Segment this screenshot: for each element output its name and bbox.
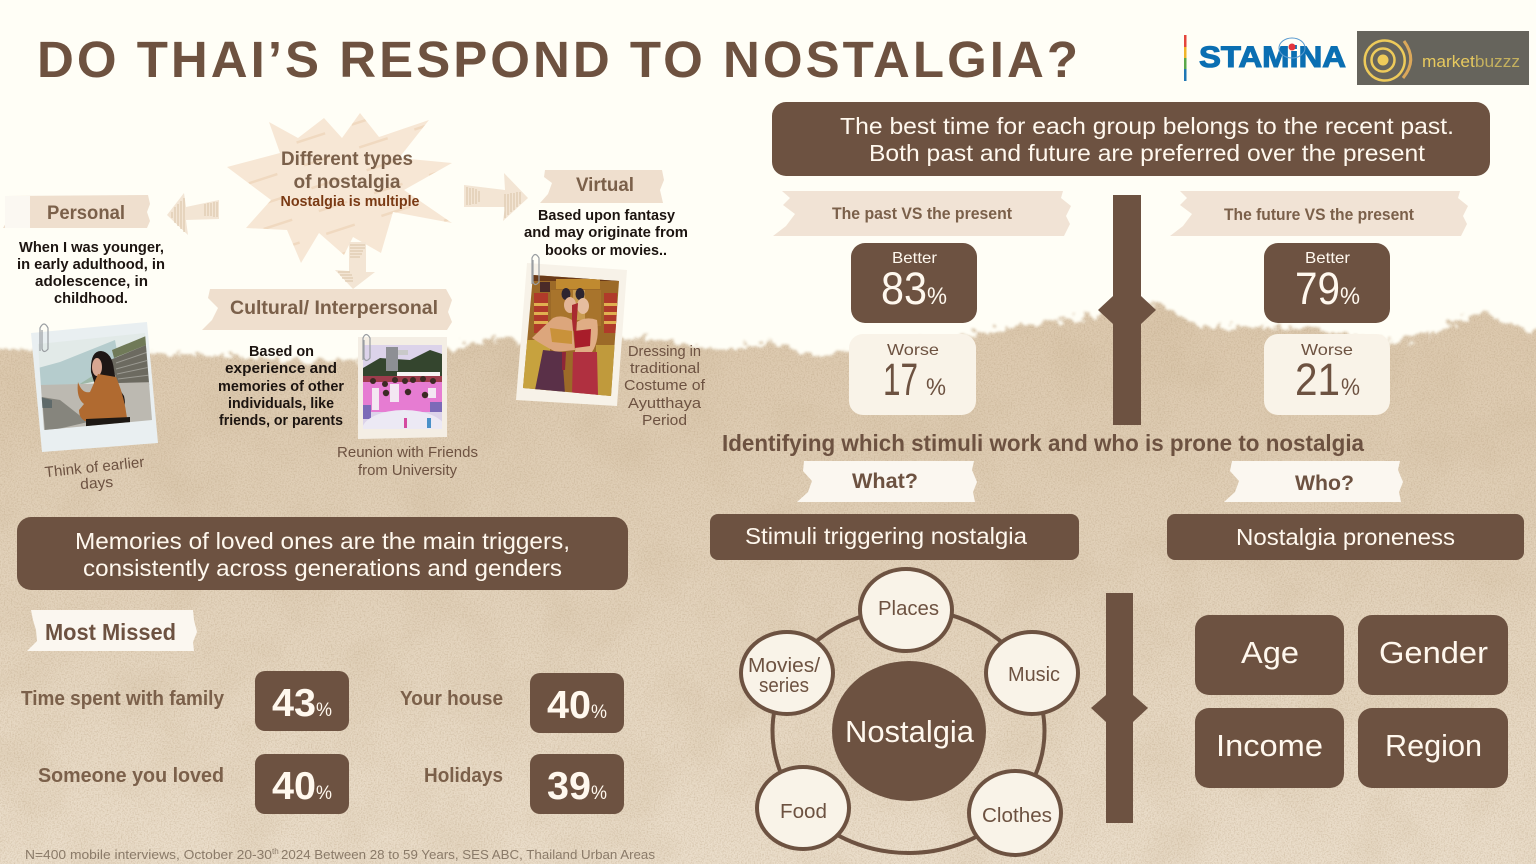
text: personal description: When I was younger, xyxy=(19,239,164,256)
text: cultural description: experience and xyxy=(225,360,337,377)
diagram: nostalgia cycle: Music xyxy=(1008,664,1060,686)
text: cultural description: Based on xyxy=(249,343,314,360)
stat: someone you loved: Someone you loved xyxy=(38,765,224,787)
diagram: nostalgia cycle: Places xyxy=(878,598,939,620)
stat: time spent with family: Time spent with family xyxy=(21,688,225,710)
text: cultural description xyxy=(218,343,344,429)
stat: holidays: Holidays xyxy=(424,765,503,787)
arrow: right to virtual xyxy=(464,173,528,221)
tape heading: most missed xyxy=(27,610,197,651)
caption: reunion with friends: Reunion with Friends xyxy=(337,444,478,461)
card: future worse 21% xyxy=(1264,334,1390,415)
panel: memories banner xyxy=(17,517,628,590)
panel: best time banner xyxy=(772,102,1490,176)
footnote: th xyxy=(272,847,279,856)
panel: starburst types of nostalgia: Different types xyxy=(281,149,413,170)
footnote: N=400 mobile interviews, October 20-30 xyxy=(25,847,272,862)
footnote xyxy=(25,847,655,862)
photo: traditional costume xyxy=(516,254,627,406)
card: future better 79%: 79 xyxy=(1295,263,1340,314)
tape heading: future vs present xyxy=(1170,191,1468,236)
tape heading: past vs present xyxy=(773,191,1071,236)
tape heading: what xyxy=(797,461,977,502)
tape heading: cultural interpersonal xyxy=(202,289,452,330)
footnote: 2024 Between 28 to 59 Years, SES ABC, Thailand Urban Areas xyxy=(281,847,655,862)
panel: proneness banner: Nostalgia proneness xyxy=(1236,524,1455,550)
stat: holidays: % xyxy=(591,783,607,804)
text: cultural description: friends, or parents xyxy=(219,412,343,429)
text: cultural description: memories of other xyxy=(218,378,344,395)
arrow: vertical divider lower xyxy=(1091,593,1148,823)
stat: your house: Your house xyxy=(400,688,503,710)
text: personal description xyxy=(17,239,165,307)
tape heading: past vs present: The past VS the present xyxy=(832,204,1012,223)
card: region: Region xyxy=(1385,728,1482,763)
card: future better 79%: Better xyxy=(1305,250,1351,267)
card: future better 79%: % xyxy=(1340,283,1360,310)
card: future better 79% xyxy=(1264,243,1390,323)
panel: starburst types of nostalgia xyxy=(227,113,452,263)
tape heading: virtual xyxy=(540,170,664,203)
caption: dressing in traditional costume: traditional xyxy=(630,360,700,377)
heading: identifying stimuli: Identifying which stimuli work and who is prone to nostalgia xyxy=(722,430,1364,456)
stat: holidays: 39 xyxy=(547,765,591,808)
stat: your house: % xyxy=(591,702,607,723)
stat: time spent with family: 43 xyxy=(272,682,316,725)
caption: think of earlier days: Think of earlier xyxy=(44,454,145,481)
card: age: Age xyxy=(1241,635,1299,670)
card: gender xyxy=(1358,615,1508,695)
logo: Stamina xyxy=(1184,35,1346,81)
stat: holidays xyxy=(424,754,624,814)
diagram: nostalgia cycle: Food xyxy=(780,801,827,823)
panel: stimuli banner xyxy=(710,514,1079,560)
card: past worse 17%: % xyxy=(926,374,946,401)
panel: starburst types of nostalgia: of nostalgia xyxy=(294,171,401,193)
logo: marketbuzzz: marketbuzzz xyxy=(1422,52,1520,71)
diagram: nostalgia cycle: Clothes xyxy=(982,805,1052,827)
panel: memories banner: Memories of loved ones are the main triggers, xyxy=(75,528,570,554)
tape heading: cultural interpersonal: Cultural/ Interpersonal xyxy=(230,297,438,319)
text: cultural description: individuals, like xyxy=(228,395,334,412)
stat: time spent with family xyxy=(21,671,349,731)
caption: dressing in traditional costume: Period xyxy=(642,412,687,429)
diagram: nostalgia cycle xyxy=(741,569,1078,855)
panel: memories banner: consistently across generations and genders xyxy=(83,555,562,581)
text: virtual description: books or movies.. xyxy=(545,242,667,259)
tape heading: who xyxy=(1224,461,1403,502)
card: income xyxy=(1195,708,1344,788)
text: personal description: childhood. xyxy=(54,290,128,307)
card: past better 83%: Better xyxy=(892,250,938,267)
diagram: nostalgia cycle: series xyxy=(759,675,809,697)
text: virtual description: Based upon fantasy xyxy=(538,207,676,224)
card: age xyxy=(1195,615,1344,695)
card: past worse 17%: Worse xyxy=(887,342,939,359)
tape heading: personal: Personal xyxy=(47,202,125,224)
caption: dressing in traditional costume: Costume of xyxy=(624,377,706,394)
tape heading: virtual: Virtual xyxy=(576,174,634,196)
background: torn sand paper xyxy=(0,290,1536,864)
photo: woman thinking xyxy=(30,322,158,452)
caption: dressing in traditional costume: Ayutthaya xyxy=(628,395,702,412)
text: virtual description: and may originate from xyxy=(524,224,688,241)
card: past worse 17%: 17 xyxy=(883,354,918,405)
card: future worse 21%: Worse xyxy=(1301,342,1353,359)
diagram: nostalgia cycle: Movies/ xyxy=(748,655,820,677)
stat: time spent with family: % xyxy=(316,700,332,721)
logo: marketbuzzz xyxy=(1357,31,1529,85)
arrow: vertical divider with diamond xyxy=(1098,195,1156,425)
tape heading: future vs present: The future VS the present xyxy=(1224,205,1414,224)
card: past better 83%: 83 xyxy=(881,263,927,314)
text: personal description: adolescence, in xyxy=(35,273,148,290)
stat: someone you loved xyxy=(38,754,349,814)
tape heading: most missed: Most Missed xyxy=(45,619,176,645)
card: past better 83%: % xyxy=(927,283,947,310)
caption: think of earlier days: days xyxy=(80,474,114,493)
panel: best time banner: The best time for each group belongs to the recent past. xyxy=(840,113,1454,139)
text: personal description: in early adulthood, in xyxy=(17,256,165,273)
tape heading: who: Who? xyxy=(1295,472,1354,495)
tape heading: what: What? xyxy=(852,470,918,493)
panel: best time banner: Both past and future are preferred over the present xyxy=(869,140,1426,166)
card: future worse 21%: 21 xyxy=(1295,354,1340,405)
card: region xyxy=(1358,708,1508,788)
title: DO THAI’S RESPOND TO NOSTALGIA? xyxy=(37,31,1078,88)
stat: someone you loved: 40 xyxy=(272,765,316,808)
caption: reunion with friends xyxy=(337,444,478,479)
stat: your house: 40 xyxy=(547,684,591,727)
panel: stimuli banner: Stimuli triggering nostalgia xyxy=(745,523,1027,549)
panel: proneness banner xyxy=(1167,514,1524,560)
arrow: down to cultural xyxy=(335,242,375,289)
card: past better 83% xyxy=(851,243,977,323)
caption: think of earlier days xyxy=(44,454,145,493)
photo: university reunion xyxy=(358,334,447,450)
stat: your house xyxy=(400,673,624,733)
card: income: Income xyxy=(1216,728,1323,763)
card: past worse 17% xyxy=(849,334,976,415)
caption: reunion with friends: from University xyxy=(358,462,457,479)
diagram: nostalgia cycle: Nostalgia xyxy=(845,714,975,749)
card: future worse 21%: % xyxy=(1341,374,1360,401)
text: virtual description xyxy=(524,207,688,259)
stat: someone you loved: % xyxy=(316,783,332,804)
logo: Stamina: STAMiNA xyxy=(1199,41,1346,74)
caption: dressing in traditional costume: Dressing in xyxy=(628,343,701,360)
caption: dressing in traditional costume xyxy=(624,343,706,429)
panel: starburst types of nostalgia: Nostalgia is multiple xyxy=(280,194,420,210)
tape heading: personal xyxy=(3,195,150,228)
arrow: left to personal xyxy=(167,193,219,235)
card: gender: Gender xyxy=(1379,635,1488,670)
